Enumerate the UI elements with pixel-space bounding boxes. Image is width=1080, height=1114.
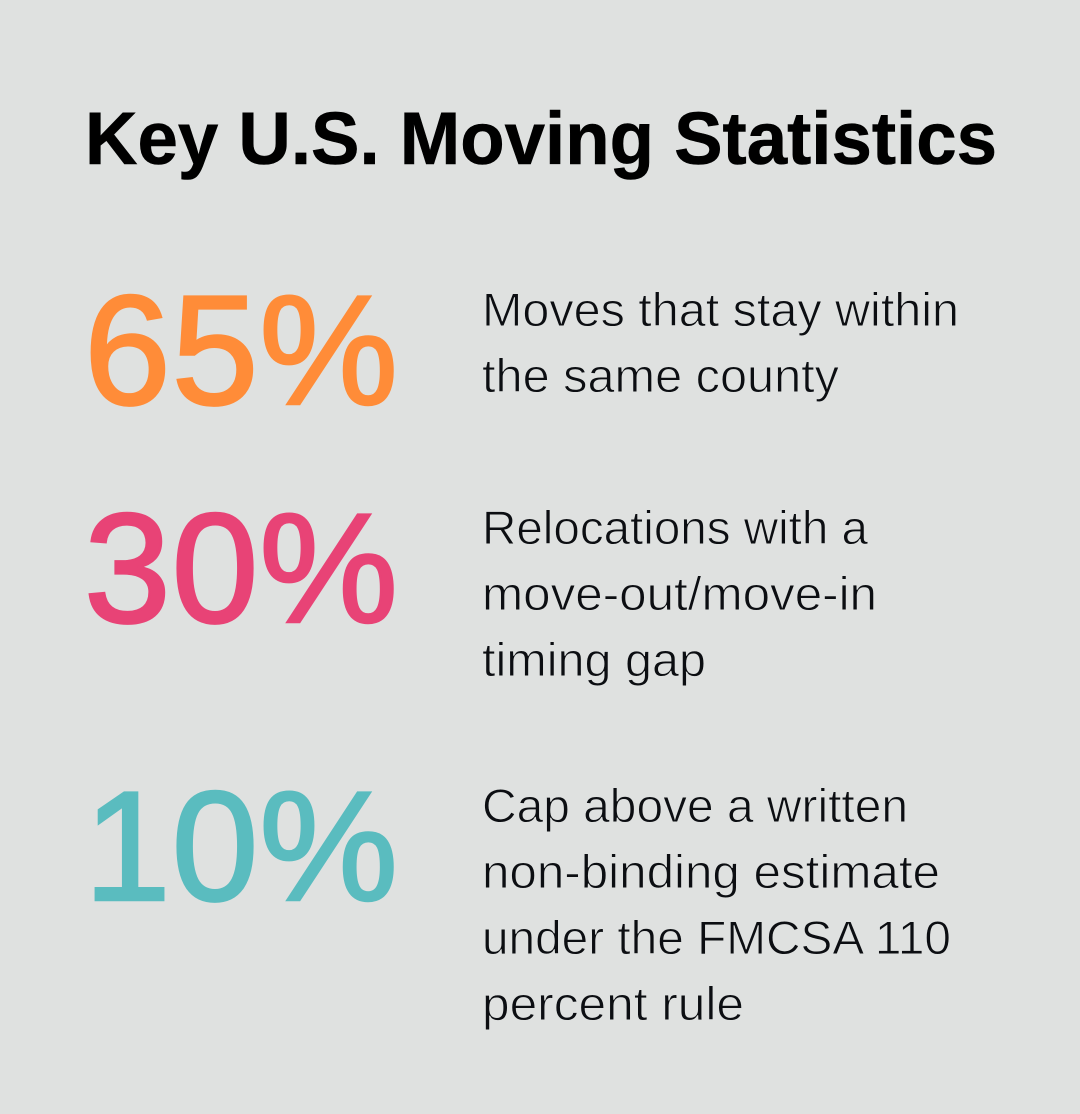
panel: 30% statistic xyxy=(84,482,877,686)
text block: 10% description: non-binding estimate xyxy=(482,845,940,898)
number: 30%: 30% xyxy=(84,482,398,656)
number: 65%: 65% xyxy=(84,264,398,438)
text block: 10% description: Cap above a written xyxy=(482,779,908,832)
title: Key U.S. Moving Statistics xyxy=(85,97,997,180)
text block: 65% description: Moves that stay within xyxy=(482,283,959,336)
text block: 10% description: percent rule xyxy=(482,977,744,1030)
text block: 10% description xyxy=(482,779,951,1030)
text block: 30% description: Relocations with a xyxy=(482,501,869,554)
panel: 65% statistic xyxy=(84,264,959,438)
text block: 65% description: the same county xyxy=(482,349,840,402)
number: 10%: 10% xyxy=(84,760,398,934)
panel: 10% statistic xyxy=(84,760,951,1030)
text block: 30% description xyxy=(482,501,877,686)
text block: 65% description xyxy=(482,283,959,402)
text block: 30% description: timing gap xyxy=(482,633,706,686)
text block: 30% description: move-out/move-in xyxy=(482,567,877,620)
text block: 10% description: under the FMCSA 110 xyxy=(482,911,951,964)
